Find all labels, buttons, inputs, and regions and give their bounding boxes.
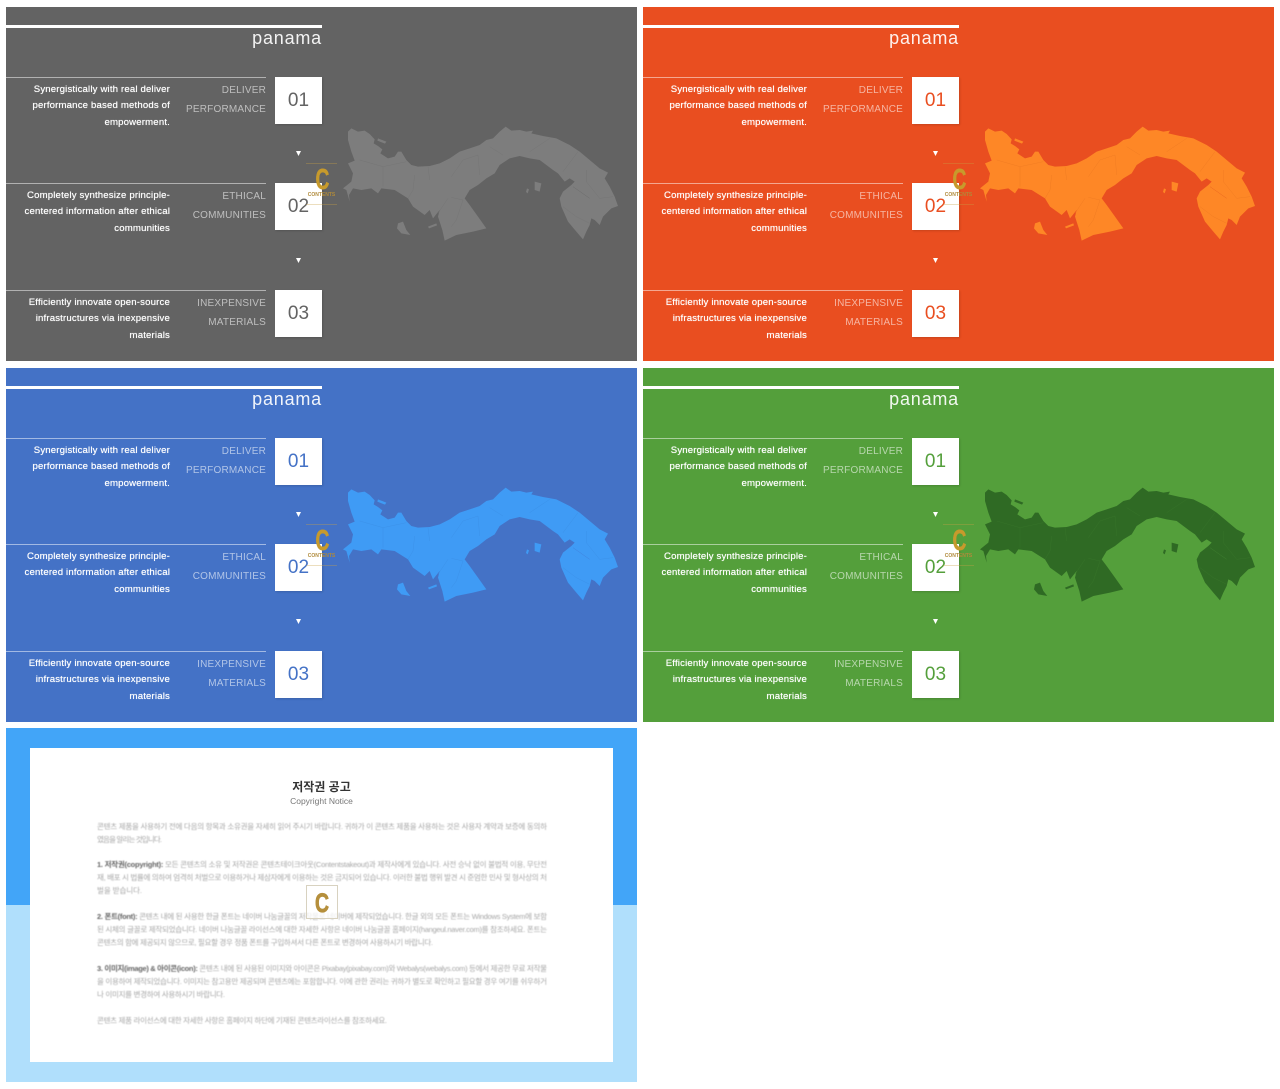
item 01: 01 bbox=[925, 451, 946, 472]
panel: green map slide bbox=[643, 368, 1274, 722]
item 01: Synergistically with real deliver bbox=[671, 84, 807, 95]
item 01: performance based methods of bbox=[32, 461, 170, 472]
item 03 bbox=[643, 290, 961, 341]
item 02: 02 bbox=[925, 196, 946, 217]
item 01: PERFORMANCE bbox=[186, 464, 266, 476]
item 03: MATERIALS bbox=[845, 316, 903, 328]
item 01 bbox=[6, 438, 324, 489]
map of Panama bbox=[343, 126, 618, 240]
notice body text: 을 이용하여 제작되었습니다. 이미지는 참고용만 제공되며 콘텐츠에는 포함합니다. 이에 관한 권리는 귀하가 별도로 확인하고 필요할 경우 여기를 쉬우하거 bbox=[97, 976, 547, 986]
top white bar bbox=[6, 386, 322, 389]
item 01: Synergistically with real deliver bbox=[34, 84, 170, 95]
item 03: INEXPENSIVE bbox=[834, 298, 903, 309]
item 02: centered information after ethical bbox=[662, 206, 807, 217]
notice body text: 2. 폰트(font): 콘텐츠 내에 된 사용한 한글 폰트는 네이버 나눔글꼴의 저작물로 네이버에 제작되었습니다. 한글 외의 모든 폰트는 Windows System에 보함 bbox=[97, 911, 547, 921]
item 03: MATERIALS bbox=[208, 678, 266, 688]
heading: panama: panama bbox=[252, 389, 322, 409]
item 02: COMMUNITIES bbox=[830, 570, 903, 582]
item 01 bbox=[643, 77, 961, 128]
item 01: Synergistically with real deliver bbox=[34, 445, 170, 456]
item 02: COMMUNITIES bbox=[193, 210, 266, 220]
arrow 1 bbox=[933, 151, 938, 156]
watermark logo bbox=[306, 163, 337, 205]
arrow 2 bbox=[296, 619, 301, 624]
item 02: ETHICAL bbox=[222, 552, 266, 563]
item 02: Completely synthesize principle- bbox=[27, 551, 170, 562]
map of Panama bbox=[343, 488, 618, 602]
item 02 bbox=[6, 544, 324, 595]
panel: blue map slide bbox=[6, 368, 637, 722]
notice background upper band bbox=[6, 728, 637, 905]
notice background lower band bbox=[6, 905, 637, 1082]
item 02: ETHICAL bbox=[859, 191, 903, 202]
item 03: Efficiently innovate open-source bbox=[29, 658, 170, 669]
notice body text: 콘텐츠 제품을 사용하기 전에 다음의 항목과 소유권을 자세히 읽어 주시기 바랍니다. 귀하가 이 콘텐츠 제품을 사용하는 것은 사용자 계약과 보증에 동의하 bbox=[97, 821, 547, 831]
item 01: empowerment. bbox=[104, 117, 170, 128]
item 03 bbox=[6, 290, 323, 341]
item 02: centered information after ethical bbox=[24, 206, 170, 217]
item 01: 01 bbox=[925, 90, 946, 111]
watermark logo bbox=[306, 524, 337, 566]
notice title: 저작권 공고 bbox=[292, 779, 351, 794]
item 03: MATERIALS bbox=[208, 316, 266, 328]
item 02: communities bbox=[751, 223, 807, 234]
notice body text: 벌을 받습니다. bbox=[97, 885, 142, 895]
item 02: ETHICAL bbox=[859, 552, 903, 563]
item 01: empowerment. bbox=[742, 478, 807, 489]
item 02: ETHICAL bbox=[222, 191, 266, 202]
item 01: DELIVER bbox=[222, 85, 266, 96]
item 01 bbox=[643, 438, 960, 489]
item 03: materials bbox=[767, 330, 807, 341]
arrow 1 bbox=[933, 512, 938, 517]
watermark logo: C bbox=[953, 164, 966, 196]
watermark logo: C bbox=[316, 164, 329, 196]
item 01: performance based methods of bbox=[669, 100, 807, 111]
item 02 bbox=[643, 544, 960, 595]
item 03 bbox=[643, 651, 960, 702]
item 01 bbox=[6, 77, 323, 128]
notice body text: 콘텐츠 제품 라이선스에 대한 자세한 사항은 홈페이지 하단에 기재된 콘텐츠라이선스를 참조하세요. bbox=[97, 1015, 387, 1025]
item 01: empowerment. bbox=[742, 117, 807, 128]
arrow 2 bbox=[933, 258, 938, 263]
item 03: 03 bbox=[925, 664, 946, 685]
item 03: infrastructures via inexpensive bbox=[36, 313, 170, 324]
item 02: 02 bbox=[288, 557, 309, 578]
item 02: Completely synthesize principle- bbox=[27, 190, 170, 201]
notice body text: 나 이미지를 변경하여 사용하시기 바랍니다. bbox=[97, 989, 225, 999]
map of Panama bbox=[980, 488, 1255, 602]
notice body text bbox=[97, 821, 547, 1025]
item 02 bbox=[6, 183, 323, 234]
item 03: INEXPENSIVE bbox=[197, 659, 266, 670]
item 01: performance based methods of bbox=[32, 100, 170, 111]
item 01: PERFORMANCE bbox=[823, 104, 903, 114]
item 03: infrastructures via inexpensive bbox=[673, 313, 807, 324]
item 03: Efficiently innovate open-source bbox=[666, 658, 807, 669]
item 03: materials bbox=[130, 330, 170, 341]
watermark logo: C bbox=[316, 525, 329, 557]
watermark logo bbox=[306, 886, 338, 918]
item 02: COMMUNITIES bbox=[830, 210, 903, 220]
item 02: communities bbox=[751, 584, 807, 595]
heading: panama: panama bbox=[889, 389, 959, 409]
arrow 1 bbox=[296, 512, 301, 517]
notice subtitle: Copyright Notice bbox=[290, 796, 353, 806]
item 03: MATERIALS bbox=[845, 678, 903, 688]
item 03: 03 bbox=[925, 303, 946, 324]
item 01: Synergistically with real deliver bbox=[671, 445, 807, 456]
item 03: 03 bbox=[288, 303, 309, 324]
heading: panama: panama bbox=[252, 28, 322, 48]
item 02: COMMUNITIES bbox=[193, 570, 266, 582]
map of Panama bbox=[980, 126, 1255, 240]
item 02: Completely synthesize principle- bbox=[664, 190, 807, 201]
top white bar bbox=[643, 386, 959, 389]
watermark logo bbox=[943, 163, 974, 205]
item 01: DELIVER bbox=[859, 85, 903, 96]
item 03: Efficiently innovate open-source bbox=[666, 297, 807, 308]
item 02: 02 bbox=[288, 196, 309, 217]
arrow 2 bbox=[296, 258, 301, 263]
item 02: centered information after ethical bbox=[24, 567, 170, 578]
watermark logo: C bbox=[953, 525, 966, 557]
item 01: 01 bbox=[288, 451, 309, 472]
item 03: INEXPENSIVE bbox=[834, 659, 903, 670]
watermark logo: CONTENTS bbox=[945, 192, 972, 198]
panel: copyright notice bbox=[6, 728, 637, 1082]
item 02: Completely synthesize principle- bbox=[664, 551, 807, 562]
item 01: performance based methods of bbox=[669, 461, 807, 472]
item 03: materials bbox=[767, 691, 807, 702]
item 03: infrastructures via inexpensive bbox=[673, 674, 807, 685]
item 02: communities bbox=[114, 223, 170, 234]
notice body text: 콘텐츠의 함에 제공되지 않으므로, 필요할 경우 정품 폰트를 구입하셔서 다른 폰트로 변경하여 사용하시기 바랍니다. bbox=[97, 937, 433, 947]
item 03: infrastructures via inexpensive bbox=[36, 674, 170, 685]
notice white card bbox=[30, 748, 613, 1062]
item 03: INEXPENSIVE bbox=[197, 298, 266, 309]
item 03: 03 bbox=[288, 664, 309, 685]
notice body text: 3. 이미지(image) & 아이콘(icon): 콘텐츠 내에 된 사용된 이미지와 아이콘은 Pixabay(pixabay.com)와 Webalys(webalys.com) 등에서 제공한 무료 저작물 bbox=[97, 963, 547, 973]
item 01: DELIVER bbox=[859, 446, 903, 457]
item 02: centered information after ethical bbox=[662, 567, 807, 578]
item 01: DELIVER bbox=[222, 446, 266, 457]
item 01: PERFORMANCE bbox=[823, 464, 903, 476]
watermark logo bbox=[943, 524, 974, 566]
heading: panama: panama bbox=[889, 28, 959, 48]
watermark logo: C bbox=[315, 888, 329, 918]
item 03 bbox=[6, 651, 324, 702]
item 03: Efficiently innovate open-source bbox=[29, 297, 170, 308]
watermark logo: CONTENTS bbox=[308, 553, 335, 559]
notice body text: 1. 저작권(copyright): 모든 콘텐츠의 소유 및 저작권은 콘텐츠테이크아웃(Contentstakeout)과 제작사에게 있습니다. 사전 승낙 없이 불법적 이용, 무단전 bbox=[97, 859, 547, 869]
item 01: 01 bbox=[288, 90, 309, 111]
item 02: communities bbox=[114, 584, 170, 595]
watermark logo: CONTENTS bbox=[308, 192, 335, 198]
notice body text: 였음을 알리는 것입니다. bbox=[97, 834, 162, 844]
arrow 2 bbox=[933, 619, 938, 624]
notice body text: 된 시체의 글꼴로 제작되었습니다. 네이버 나눔글꼴 라이선스에 대한 자세한 사항은 네이버 나눔글꼴 홈페이지(hangeul.naver.com)를 참조하세요. 폰트는 bbox=[97, 924, 547, 934]
item 01: empowerment. bbox=[104, 478, 170, 489]
panel: orange map slide bbox=[643, 7, 1274, 361]
item 03: materials bbox=[130, 691, 170, 702]
item 02: 02 bbox=[925, 557, 946, 578]
notice body text: 재, 배포 시 법률에 의하여 엄격히 처벌으로 이용하거나 제삼자에게 이용하는 것은 금지되어 있습니다. 이러한 불법 행위 발견 시 준엄한 민사 및 형사상의 처 bbox=[97, 872, 547, 882]
top white bar bbox=[6, 25, 322, 28]
panel: grey map slide bbox=[6, 7, 637, 361]
item 01: PERFORMANCE bbox=[186, 104, 266, 114]
arrow 1 bbox=[296, 151, 301, 156]
top white bar bbox=[643, 25, 959, 28]
item 02 bbox=[643, 183, 961, 234]
watermark logo: CONTENTS bbox=[945, 553, 972, 559]
